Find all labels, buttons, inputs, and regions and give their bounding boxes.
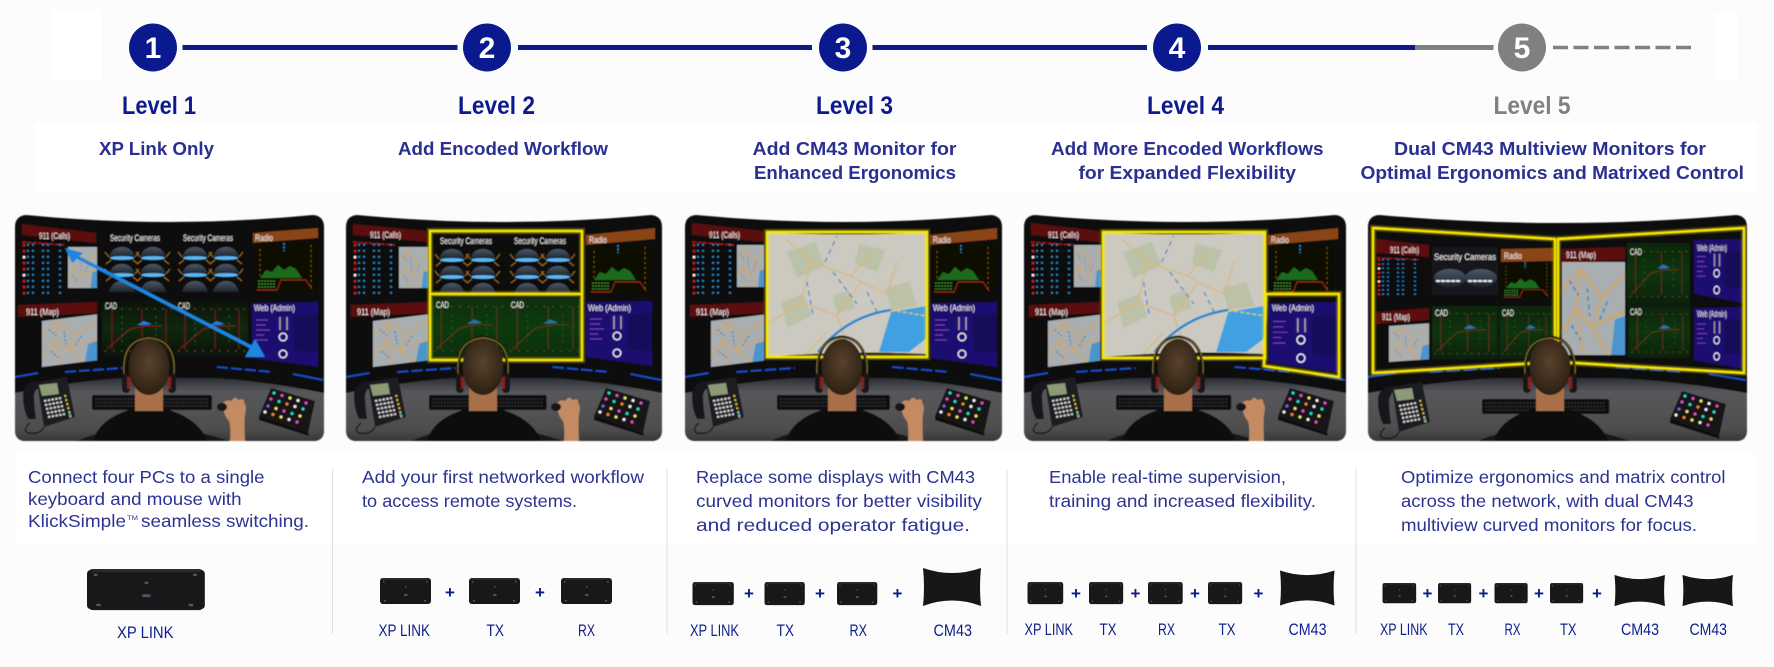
screen: 911 map: 911 (Map) — [26, 307, 59, 318]
highlight: CM43 monitor — [767, 232, 927, 357]
icon: phone — [354, 377, 406, 433]
subtitle level 5: Dual CM43 Multiview Monitors for — [1394, 138, 1706, 159]
equipment: level 4: TX — [1218, 620, 1236, 639]
equipment: level 3: + — [815, 584, 825, 603]
left monitor: 911 calls: 911 (Calls) — [1390, 245, 1419, 256]
right monitor: web admin: Web (Admin) — [1697, 309, 1727, 320]
screen: 911 map — [351, 302, 428, 367]
text block: level 3 description: Replace some displays with CM43 — [696, 467, 975, 487]
icon: keypad — [594, 388, 650, 436]
equipment: level 4: TX — [1100, 620, 1116, 639]
screen: security cameras — [435, 236, 575, 294]
text block: level 1 description: KlickSimple — [28, 511, 126, 531]
subtitle level 4 — [1051, 138, 1324, 183]
text block: level 5 description: across the network, with dual CM43 — [1401, 491, 1694, 511]
step marker 2: 2 — [479, 32, 495, 65]
screen: CM43 curved map — [767, 232, 927, 357]
screen: security cameras: Security Cameras — [110, 233, 160, 244]
icon: keypad — [935, 388, 991, 436]
text block: level 1 description: seamless switching. — [141, 511, 309, 531]
equipment: level 4: + — [1190, 584, 1200, 603]
highlight: CM43 monitor and web workflow — [1103, 232, 1339, 377]
step marker 4: 4 — [1169, 32, 1186, 65]
screen: 911 calls: 911 (Calls) — [1048, 230, 1079, 241]
right monitor: CAD — [1627, 243, 1690, 358]
equipment: level 3: TX — [776, 621, 794, 640]
text block: level 4 description: training and increased flexibility. — [1049, 491, 1316, 511]
screen: security cameras — [105, 233, 243, 292]
right monitor: web admin: Web (Admin) — [1697, 243, 1727, 254]
icon: phone — [1031, 377, 1083, 433]
icon: hand on mouse — [551, 398, 580, 441]
left monitor: CAD: CAD — [1502, 308, 1514, 319]
screen: security cameras: Security Cameras — [183, 233, 233, 244]
icon: phone — [1378, 382, 1430, 438]
heading: Level 2: Level 2 — [458, 92, 535, 120]
text block: level 4 description — [1049, 467, 1316, 511]
subtitle level 2: Add Encoded Workflow — [398, 138, 609, 159]
equipment: level 4: + — [1071, 584, 1081, 603]
screen: web admin — [252, 302, 318, 367]
screen: 911 calls: 911 (Calls) — [39, 231, 70, 242]
icon: phone — [692, 377, 744, 433]
step marker 2 — [463, 24, 511, 72]
screen: web admin: Web (Admin) — [933, 303, 975, 314]
left monitor: radio: Radio — [1504, 251, 1522, 262]
equipment: level 1: XP LINK — [117, 623, 174, 642]
text block: level 1 description: Connect four PCs to a single — [28, 467, 264, 487]
icon: keypad — [1670, 391, 1726, 439]
heading: Level 4: Level 4 — [1147, 92, 1224, 120]
icon: operator — [77, 337, 229, 441]
text block: level 3 description — [696, 467, 982, 535]
right monitor: 911 map: 911 (Map) — [1566, 250, 1596, 261]
screen: radio — [586, 228, 655, 293]
screen: radio: Radio — [1271, 235, 1289, 246]
text block: level 1 description: keyboard and mouse with — [28, 489, 242, 509]
left monitor: 911 calls — [1376, 239, 1429, 296]
screen: 911 map — [18, 302, 97, 367]
screen: web admin: Web (Admin) — [1272, 303, 1314, 314]
equipment: level 5: + — [1479, 584, 1489, 603]
icon: hand on mouse — [1236, 398, 1265, 441]
screen: web admin — [1269, 302, 1337, 372]
equipment: level 2: XP LINK — [378, 621, 431, 640]
text block: level 5 description: Optimize ergonomics and matrix control — [1401, 467, 1726, 487]
right monitor: CAD: CAD — [1630, 307, 1642, 318]
left monitor: 911 map: 911 (Map) — [1382, 312, 1410, 323]
equipment: level 4 — [1024, 570, 1335, 639]
screen: CAD: CAD — [178, 301, 190, 312]
equipment: level 4: XP LINK — [1024, 620, 1073, 639]
subtitle level 3: Add CM43 Monitor for — [752, 138, 956, 159]
screen: 911 calls: 911 (Calls) — [709, 230, 740, 241]
timeline progress line — [182, 45, 1695, 50]
equipment: level 4: + — [1254, 584, 1264, 603]
icon: operator — [1106, 337, 1258, 441]
highlight: encoded workflow screens — [430, 231, 582, 360]
equipment: level 5: RX — [1504, 620, 1520, 639]
icon: keyboard — [777, 395, 890, 410]
screen: 911 calls — [692, 223, 764, 296]
subtitle level 1: XP Link Only — [99, 138, 215, 159]
screen: CAD: CAD — [511, 300, 524, 311]
screen: web admin: Web (Admin) — [588, 303, 631, 314]
equipment: level 4: CM43 — [1288, 620, 1326, 639]
icon: keypad — [259, 388, 315, 436]
right monitor: CAD: CAD — [1630, 247, 1642, 258]
left monitor: radio — [1501, 248, 1553, 298]
step marker 4 — [1153, 24, 1201, 72]
panel: level 4 control room — [1024, 215, 1346, 441]
screen: radio — [1268, 228, 1338, 293]
panel: level 1 control room — [15, 215, 324, 441]
left monitor: 911 map — [1376, 308, 1429, 362]
step marker 3 — [819, 24, 867, 72]
screen: security cameras: Security Cameras — [440, 236, 492, 247]
text block: level 2 description: Add your first networked workflow — [362, 467, 644, 487]
screen: 911 map: 911 (Map) — [696, 307, 729, 318]
icon: hand on mouse — [217, 398, 246, 441]
equipment: level 2 — [378, 578, 612, 640]
text block: level 2 description — [362, 467, 644, 511]
equipment: level 4: + — [1131, 584, 1141, 603]
screen: radio: Radio — [255, 233, 273, 244]
step marker 3: 3 — [835, 32, 851, 65]
equipment: level 5: TX — [1448, 620, 1464, 639]
equipment: level 5: + — [1592, 584, 1602, 603]
left monitor: CAD: CAD — [1435, 308, 1448, 319]
text block: level 1 description: TM — [127, 516, 138, 522]
equipment: level 5: CM43 — [1621, 620, 1659, 639]
subtitle level 4: Add More Encoded Workflows — [1051, 138, 1324, 159]
equipment: level 3: CM43 — [934, 621, 972, 640]
screen: radio: Radio — [589, 235, 607, 246]
equipment: level 1 — [87, 569, 205, 642]
left monitor: CAD — [1432, 306, 1553, 359]
text block: level 5 description — [1401, 467, 1726, 535]
text block: level 4 description: Enable real-time supervision, — [1049, 467, 1286, 487]
subtitle level 3: Enhanced Ergonomics — [754, 162, 956, 183]
step marker 5: 5 — [1514, 32, 1530, 65]
panel: level 5 control room — [1368, 215, 1747, 441]
step marker 1: 1 — [145, 32, 161, 65]
equipment: level 3: XP LINK — [690, 621, 739, 640]
screen: radio: Radio — [933, 235, 951, 246]
equipment: level 5: TX — [1560, 620, 1576, 639]
left monitor: security cameras: Security Cameras — [1434, 252, 1496, 263]
icon: keyboard — [1482, 399, 1609, 414]
text block: level 2 description: to access remote systems. — [362, 491, 577, 511]
screen: web admin — [931, 302, 997, 367]
screen: security cameras: Security Cameras — [514, 236, 566, 247]
screen: web admin: Web (Admin) — [254, 303, 295, 314]
highlight: dual CM43 monitors — [1373, 228, 1744, 373]
equipment: level 3 — [690, 568, 981, 640]
screen: radio — [253, 228, 318, 291]
equipment: level 5 — [1380, 575, 1733, 639]
panel: level 2 control room — [346, 215, 662, 441]
heading: Level 5: Level 5 — [1494, 92, 1571, 120]
step marker 5 — [1498, 24, 1546, 72]
icon: operator — [411, 337, 563, 441]
subtitle level 5 — [1360, 138, 1744, 183]
panel: level 3 control room — [685, 215, 1002, 441]
screen: web admin — [586, 301, 652, 366]
screen: 911 map: 911 (Map) — [357, 307, 390, 318]
equipment: level 5: + — [1423, 584, 1433, 603]
equipment: level 4: RX — [1158, 620, 1175, 639]
screen: 911 map — [1029, 302, 1100, 367]
screen: 911 calls — [353, 224, 428, 296]
equipment: level 2: + — [535, 583, 545, 602]
text block: level 1 description — [28, 467, 309, 531]
icon: operator — [1478, 337, 1630, 441]
text block: level 3 description: and reduced operator fatigue. — [696, 515, 970, 535]
equipment: level 2: + — [445, 583, 455, 602]
screen: CAD: CAD — [436, 300, 449, 311]
screen: CAD — [102, 301, 248, 357]
right monitor: 911 map — [1562, 247, 1625, 355]
icon: keypad — [1278, 388, 1334, 436]
icon: keyboard — [429, 395, 547, 410]
icon: operator — [770, 337, 922, 441]
screen: CM43 curved map — [1103, 232, 1265, 357]
screen: 911 map: 911 (Map) — [1035, 307, 1068, 318]
text block: level 5 description: multiview curved monitors for focus. — [1401, 515, 1697, 535]
equipment: level 3: RX — [850, 621, 867, 640]
equipment: level 2: TX — [486, 621, 504, 640]
left monitor: security cameras — [1432, 247, 1498, 295]
equipment: level 2: RX — [578, 621, 595, 640]
equipment: level 5: XP LINK — [1380, 620, 1428, 639]
icon: hand on mouse — [895, 398, 924, 441]
right monitor: web admin — [1694, 239, 1742, 369]
equipment: level 5: + — [1534, 584, 1544, 603]
screen: CAD: CAD — [105, 301, 117, 312]
subtitle level 5: Optimal Ergonomics and Matrixed Control — [1360, 162, 1744, 183]
arrow: cursor crossing screens — [65, 248, 265, 357]
screen: 911 calls — [22, 224, 97, 296]
equipment: level 5: CM43 — [1690, 620, 1727, 639]
icon: phone — [23, 377, 75, 433]
screen: 911 map — [690, 302, 764, 367]
icon: keyboard — [1116, 395, 1231, 410]
screen: 911 calls: 911 (Calls) — [370, 230, 401, 241]
heading: Level 1: Level 1 — [122, 92, 196, 120]
icon: keyboard — [92, 395, 212, 410]
subtitle level 4: for Expanded Flexibility — [1078, 162, 1297, 183]
screen: radio — [930, 228, 997, 293]
subtitle level 3 — [752, 138, 956, 183]
equipment: level 3: + — [744, 584, 754, 603]
step marker 1 — [129, 24, 177, 72]
heading: Level 3: Level 3 — [816, 92, 893, 120]
dividers — [332, 469, 1356, 634]
text block: level 3 description: curved monitors for better visibility — [696, 491, 982, 511]
equipment: level 3: + — [893, 584, 903, 603]
screen: 911 calls — [1031, 223, 1101, 296]
screen: CAD — [431, 298, 582, 358]
